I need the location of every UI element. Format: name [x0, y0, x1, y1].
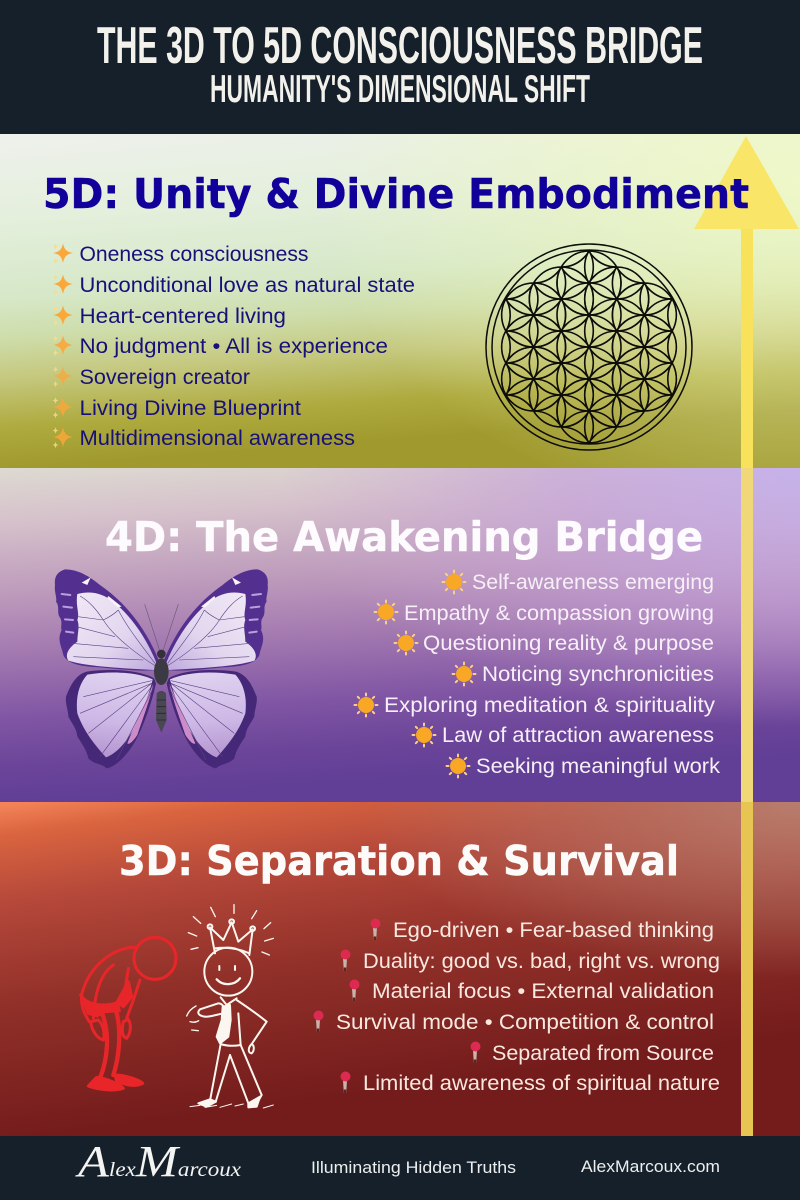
heading: 4D: 4D: The Awakening Bridge: [105, 513, 703, 561]
panel: 5D Unity and Divine Embodiment: [46, 176, 748, 451]
icon: white crowned ego figure: [187, 905, 273, 1108]
icon: flower of life: [485, 243, 693, 451]
list: 3D traits: Ego-driven • Fear-based thinking: [393, 919, 714, 942]
list: 5D traits: Multidimensional awareness: [80, 427, 355, 450]
list: 4D traits: Exploring meditation & spirituality: [384, 694, 716, 717]
list: 4D traits: Empathy & compassion growing: [404, 602, 714, 625]
list: 5D traits: Heart-centered living: [80, 305, 286, 328]
list: 4D traits: Law of attraction awareness: [442, 724, 714, 747]
list: 5D traits: Unconditional love as natural state: [80, 274, 415, 297]
list: 3D traits: Separated from Source: [492, 1042, 714, 1065]
header background: [0, 0, 800, 134]
list: 5D traits: Oneness consciousness: [80, 243, 308, 266]
signature: AlexM arcoux: [75, 1137, 241, 1186]
list: 5D traits: Sovereign creator: [80, 366, 250, 389]
footer background: [0, 1136, 800, 1200]
panel: 3D Separation and Survival: [0, 802, 800, 1136]
list: 5D traits: [52, 243, 415, 450]
list: 4D traits: [354, 570, 721, 778]
list: 5D traits: No judgment • All is experience: [80, 335, 388, 358]
icon: red slumped figure: [81, 937, 176, 1090]
list: 4D traits: Seeking meaningful work: [476, 755, 721, 778]
title block: [97, 17, 703, 111]
list: 3D traits: Material focus • External validation: [372, 980, 714, 1003]
list: 3D traits: Duality: good vs. bad, right vs. wrong: [363, 950, 720, 973]
list: 3D traits: Limited awareness of spiritual nature: [363, 1072, 720, 1095]
panel background: 3D: [0, 802, 800, 1136]
list: 4D traits: Self-awareness emerging: [472, 571, 714, 594]
website: AlexMarcoux.com: [581, 1157, 720, 1176]
heading: 3D: 3D: Separation & Survival: [119, 837, 679, 885]
list: 4D traits: Noticing synchronicities: [482, 663, 714, 686]
panel: 4D The Awakening Bridge: [0, 468, 800, 802]
heading: 5D: 5D: Unity & Divine Embodiment: [43, 170, 749, 218]
arrow: upward ascension: [694, 136, 799, 1136]
panel background: 4D: [0, 468, 800, 802]
tagline: Illuminating Hidden Truths: [311, 1158, 516, 1177]
panel background: 5D: [0, 134, 800, 468]
list: 3D traits: Survival mode • Competition & control: [336, 1011, 714, 1034]
footer: [75, 1137, 720, 1186]
list: 5D traits: Living Divine Blueprint: [80, 397, 301, 420]
icon: purple butterfly: [55, 569, 268, 768]
list: 4D traits: Questioning reality & purpose: [423, 632, 714, 655]
list: 3D traits: [314, 918, 720, 1095]
